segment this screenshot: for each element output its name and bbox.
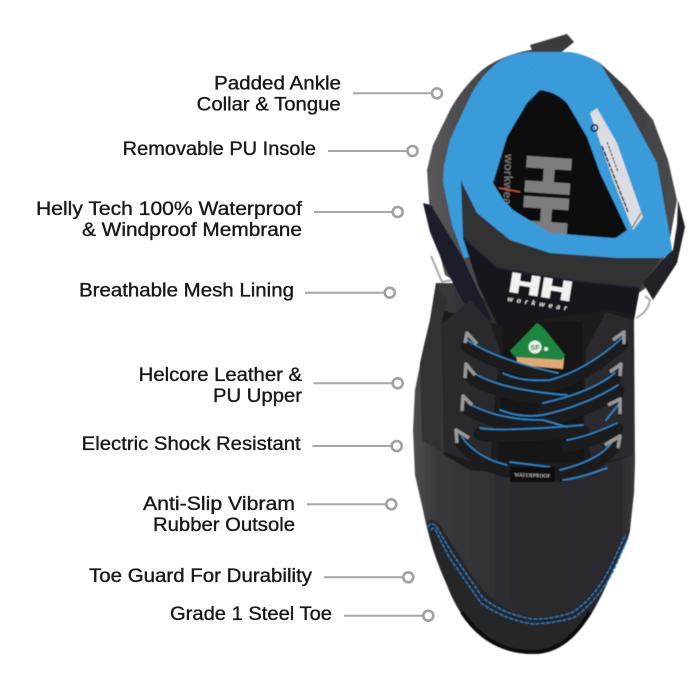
label: Toe Guard For Durability: [89, 566, 413, 587]
label: Helcore Leather & PU Upper: Helcore Leather &: [139, 365, 302, 386]
insole HH logo: workwear: [500, 153, 516, 210]
label: Helcore Leather & PU Upper: [139, 365, 403, 407]
collar exterior: [427, 50, 677, 320]
label: Breathable Mesh Lining: [79, 281, 395, 302]
waterproof tag: [510, 467, 555, 482]
label: Helly Tech membrane: Helly Tech 100% Waterproof: [36, 199, 303, 220]
tongue lining: [462, 174, 663, 258]
tongue lower panel: [463, 238, 640, 330]
icon: metal rings: [431, 256, 650, 318]
label: Anti-Slip Vibram Rubber Outsole: Anti-Slip Vibram: [143, 494, 295, 515]
lace blue trim: [462, 338, 622, 480]
insole HH logo: [498, 153, 573, 235]
label: Removable PU Insole: [123, 139, 417, 160]
blue mesh collar lining: [443, 52, 673, 258]
label: Padded Ankle Collar & Tongue: [197, 74, 442, 116]
label: Electric Shock Resistant: Electric Shock Resistant: [82, 434, 301, 455]
label: Anti-Slip Vibram Rubber Outsole: Rubber Outsole: [153, 515, 295, 536]
label: Removable PU Insole: Removable PU Insole: [123, 139, 316, 160]
label: Helcore Leather & PU Upper: PU Upper: [213, 386, 303, 407]
label: Grade 1 Steel Toe: [170, 604, 433, 625]
boot illustration: [413, 34, 685, 654]
HH workwear logo: HH: [507, 267, 575, 307]
waterproof tag: WATERPROOF: [514, 472, 551, 480]
label: Grade 1 Steel Toe: Grade 1 Steel Toe: [170, 604, 332, 625]
blue stitching: [428, 524, 628, 624]
label: Padded Ankle Collar & Tongue: Collar & Tongue: [197, 94, 341, 116]
lower boot body: [413, 283, 640, 654]
insole: [492, 90, 628, 238]
label: Electric Shock Resistant: [82, 434, 402, 455]
pull tab: [530, 34, 574, 64]
insole HH logo: HH: [510, 153, 583, 238]
right side flap: [643, 200, 685, 300]
label: Toe Guard For Durability: Toe Guard For Durability: [89, 566, 313, 587]
eyelet facing panels: [441, 300, 500, 468]
eyelets: [456, 332, 624, 448]
label: Breathable Mesh Lining: Breathable Mesh Lining: [79, 281, 294, 302]
toe guard: [427, 520, 630, 654]
left side flap: [423, 203, 492, 324]
tongue upper panel: [461, 180, 660, 288]
front tongue centre: [498, 322, 584, 462]
HH workwear logo: workwear: [507, 296, 568, 313]
label: Padded Ankle Collar & Tongue: Padded Ankle: [214, 74, 341, 94]
label: Anti-Slip Vibram Rubber Outsole: [143, 494, 396, 536]
left boot edge panel: [420, 283, 447, 452]
sole edge: [462, 612, 590, 652]
tongue seam: [463, 238, 640, 288]
HH workwear logo: [506, 267, 575, 313]
sewn-in tag: [590, 108, 643, 230]
laces: [462, 344, 622, 476]
right eyelet facing: [584, 312, 633, 465]
icon: CSA green triangle tag: SF: [530, 343, 540, 352]
lace throat panel: [441, 310, 633, 478]
label: Helly Tech membrane: [36, 199, 403, 241]
icon: CSA green triangle tag: [510, 323, 565, 369]
label: Helly Tech membrane: & Windproof Membrane: [82, 220, 302, 241]
